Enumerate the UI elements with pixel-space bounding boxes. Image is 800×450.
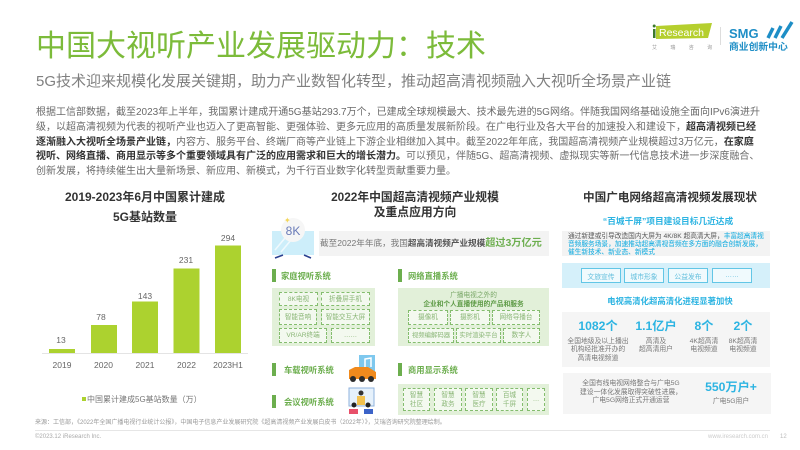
bar chart: 5G base stations: 78 <box>96 312 106 322</box>
tag <box>581 268 621 283</box>
tag: 千屏 <box>503 400 516 408</box>
tag <box>465 388 493 411</box>
tag: 智慧 <box>410 392 423 398</box>
caption <box>639 337 673 353</box>
bar chart: 5G base stations: 中国累计建成5G基站数量（万） <box>87 394 202 404</box>
bar chart: 5G base stations: 13 <box>56 335 66 345</box>
caption: 8K超高清 <box>729 338 757 345</box>
caption <box>690 337 718 353</box>
panel: 5G users <box>563 373 771 414</box>
tag <box>503 328 540 343</box>
tag <box>668 268 708 283</box>
callout: market size: 截至2022年年底，我国超高清视频产业规模超过3万亿元 <box>320 238 542 249</box>
value: 550万户+ <box>705 380 757 394</box>
bar chart: 5G base stations: 143 <box>138 291 152 301</box>
heading: 5G base stations: 5G基站数量 <box>113 210 177 224</box>
heading: UHD video market: 及重点应用方向 <box>374 205 456 219</box>
tag: 公益发布 <box>674 274 702 280</box>
tag <box>408 328 454 343</box>
panel: TV HD stats <box>562 312 770 367</box>
panel: use-case tags <box>562 263 770 288</box>
intro text block: 级，以超高清视频为代表的视听产业也迈入了更高智能、更强体验、更多元应用的高质量发展新阶段。在广电行业及各大平台的加速投入和建设下，超高清视频已经 <box>36 122 756 133</box>
caption <box>728 337 757 353</box>
tag: 网络导播台 <box>500 314 532 321</box>
sub-heading: TV HD progress: 电视高清化超高清化进程显著加快 <box>607 296 733 306</box>
caption: 广电5G用户 <box>713 398 749 405</box>
tag: 百城 <box>503 392 516 398</box>
callout: market size <box>319 231 549 256</box>
source note: 来源：工信部，《2022年全国广播电视行业统计公报》，中国电子信息产业发展研究院《超高清视频产业发展白皮书（2022年）》，艾瑞咨询研究院整理绘制。 <box>35 420 446 426</box>
heading: commercial display <box>398 363 458 376</box>
text box: hundred cities: 催生新技术、新业态、新模式 <box>568 249 655 256</box>
text box: hundred cities: 通过新建或引导改造国内大屏为 4K/8K 超高清大屏，丰富超高清视 <box>568 232 764 240</box>
bar chart: 5G base stations: 2023H1 <box>213 360 243 370</box>
icon: 8K TV: ✦ <box>284 216 291 225</box>
tag <box>492 310 540 325</box>
label: 家庭视听系统 <box>281 271 331 281</box>
icon: 8K TV: 8K <box>286 224 300 238</box>
tag: 文旅宣传 <box>587 274 615 280</box>
value: 2个 <box>734 319 752 333</box>
marker <box>272 395 276 408</box>
bar chart: 5G base stations: 2021 <box>136 360 155 370</box>
tag <box>408 310 448 325</box>
panel caption: 企业和个人直播使用的产品和服务 <box>423 301 524 308</box>
value: 1082个 <box>578 319 618 333</box>
heading: live streaming system <box>398 269 458 282</box>
stat: 1082 channels <box>567 319 629 362</box>
logo divider <box>720 27 721 45</box>
caption: 机构经批准开办的 <box>571 346 625 353</box>
tag: 折叠屏手机 <box>329 296 362 302</box>
tag <box>456 328 501 343</box>
label: 会议视听系统 <box>284 397 334 407</box>
panel caption <box>423 291 524 308</box>
tag <box>624 268 664 283</box>
heading: broadcast network: 中国广电网络超高清视频发展现状 <box>583 191 757 204</box>
tag <box>321 292 370 306</box>
tag: 社区 <box>410 400 423 408</box>
heading: home system <box>272 269 331 282</box>
tag: 数字人 <box>512 332 531 339</box>
stat: 8K channels <box>728 319 757 353</box>
text box: hundred cities: 音频服务场景，加速推动超高清视音频在多方面的融合创新发展， <box>568 241 762 248</box>
tag: 智能音响 <box>285 314 311 320</box>
caption: 全国地级及以上播出 <box>567 338 629 345</box>
intro text block <box>36 106 760 177</box>
text box: hundred cities <box>562 231 770 256</box>
tag <box>279 328 327 343</box>
panel: live streaming <box>398 288 549 346</box>
SMG caption: 商业创新中心 <box>729 42 788 53</box>
title: 中国大视听产业发展驱动力：技术 <box>36 30 486 63</box>
tag: VR/AR终端 <box>286 332 320 339</box>
tag: … <box>533 396 539 403</box>
bar chart: 5G base stations: 2020 <box>94 360 113 370</box>
tag: …… <box>344 332 357 339</box>
panel: home system <box>272 288 375 346</box>
SMG wordmark <box>729 21 794 40</box>
tag: 实时渲染平台 <box>459 332 498 339</box>
tag: 摄影机 <box>460 314 480 321</box>
tag: …… <box>725 272 739 279</box>
logo: SMG <box>729 21 794 53</box>
footer copyright: ©2023.12 iResearch Inc. <box>35 434 101 440</box>
caption: 4K超高清 <box>690 338 718 345</box>
intro text block: 视听、网络直播、商用显示等多个重要领域具有广泛的应用需求和巨大的增长潜力。可以预见，伴随5G、超高清视频、虚拟现实等新一代信息技术进一步深度融合、 <box>36 151 759 162</box>
caption <box>567 337 629 362</box>
value: 8个 <box>695 319 713 333</box>
bar chart: 5G base stations: 294 <box>221 233 235 243</box>
heading: 5G base stations: 2019-2023年6月中国累计建成 <box>65 190 225 204</box>
heading: 5G base stations <box>65 190 225 224</box>
logo: iResearch <box>652 23 712 51</box>
subtitle: 5G技术迎来规模化发展关键期，助力产业数智化转型，推动超高清视频融入大视听全场景产业链 <box>36 73 671 90</box>
icon: 8K TV <box>272 216 314 259</box>
tag <box>496 388 523 411</box>
description <box>580 379 682 404</box>
marker <box>272 269 276 282</box>
panel: commercial display <box>398 384 549 415</box>
caption: 电视频道 <box>690 346 718 353</box>
label: 网络直播系统 <box>408 271 458 281</box>
intro text block: 创新发展，将持续催生出大量新场景、新应用、新模式，为千行百业数字化转型贡献重要力量。 <box>36 166 456 177</box>
intro text block: 根据工信部数据，截至2023年上半年，我国累计建成开通5G基站293.7万个，已建成全球规模最大、技术最先进的5G网络。伴随我国网络基础设施全面向IPv6演进升 <box>36 107 760 118</box>
marker <box>272 363 276 376</box>
caption: 超高清用户 <box>639 346 673 353</box>
tag: 政务 <box>441 400 455 408</box>
tag <box>527 388 545 411</box>
bar chart: 5G base stations: 2022 <box>177 360 196 370</box>
stat: 4K channels <box>690 319 718 353</box>
stat: 110M users <box>635 319 677 353</box>
heading: UHD video market <box>331 190 499 219</box>
intro text block: 逐渐融入大视听全场景产业链，内容方、服务平台、终端厂商等产业链上下游企业相继加入其中。截至2022年年底，我国超高清视频产业规模超过3万亿元，在家庭 <box>36 137 754 148</box>
tag <box>331 328 370 343</box>
tag: 视频编解码器 <box>412 332 450 339</box>
tag <box>712 268 752 283</box>
description: 广电5G网络正式开通运营 <box>592 397 670 404</box>
page number: 12 <box>780 434 787 440</box>
tag: 8K电视 <box>288 296 309 302</box>
logo mark: Research <box>659 27 704 39</box>
bar chart: 5G base stations <box>42 233 248 404</box>
caption: 高清电视频道 <box>578 355 618 362</box>
label: 车载视听系统 <box>284 365 334 375</box>
tag: 智慧 <box>441 392 455 398</box>
icon: meeting <box>348 388 374 414</box>
tag <box>279 309 317 325</box>
caption: 电视频道 <box>729 346 757 353</box>
tag: 摄像机 <box>418 314 438 321</box>
panel caption: 广播电视之外的 <box>450 292 497 299</box>
tag: 智慧 <box>472 392 486 398</box>
footer link: www.iresearch.com.cn <box>708 434 768 440</box>
tag <box>279 292 318 306</box>
logo caption: 艾 瑞 咨 询 <box>652 45 712 51</box>
label: 商用显示系统 <box>408 365 458 375</box>
tag <box>321 309 370 325</box>
bar chart: 5G base stations: 231 <box>179 255 193 265</box>
sub-heading: hundred cities: “百城千屏”项目建设目标几近达成 <box>603 216 733 226</box>
bar chart: 5G base stations: 2019 <box>53 360 72 370</box>
heading: UHD video market: 2022年中国超高清视频产业规模 <box>331 190 499 204</box>
description: 建设一体化发展取得突破性进展， <box>580 389 682 396</box>
tag <box>450 310 490 325</box>
tag: 城市形象 <box>630 274 658 280</box>
value: 1.1亿户 <box>635 319 677 333</box>
marker <box>398 269 402 282</box>
marker <box>398 363 402 376</box>
logo mark <box>652 23 712 39</box>
caption: 高清及 <box>646 338 666 345</box>
tag <box>403 388 430 411</box>
heading: in-car system <box>272 363 334 376</box>
tag <box>434 388 462 411</box>
heading: conference system <box>272 395 334 408</box>
tag: 智能交互大屏 <box>326 314 365 320</box>
description: 全国有线电视网络整合与广电5G <box>582 380 680 387</box>
footer rule <box>35 430 770 431</box>
icon: car with music <box>349 355 376 382</box>
tag: 医疗 <box>472 400 486 408</box>
